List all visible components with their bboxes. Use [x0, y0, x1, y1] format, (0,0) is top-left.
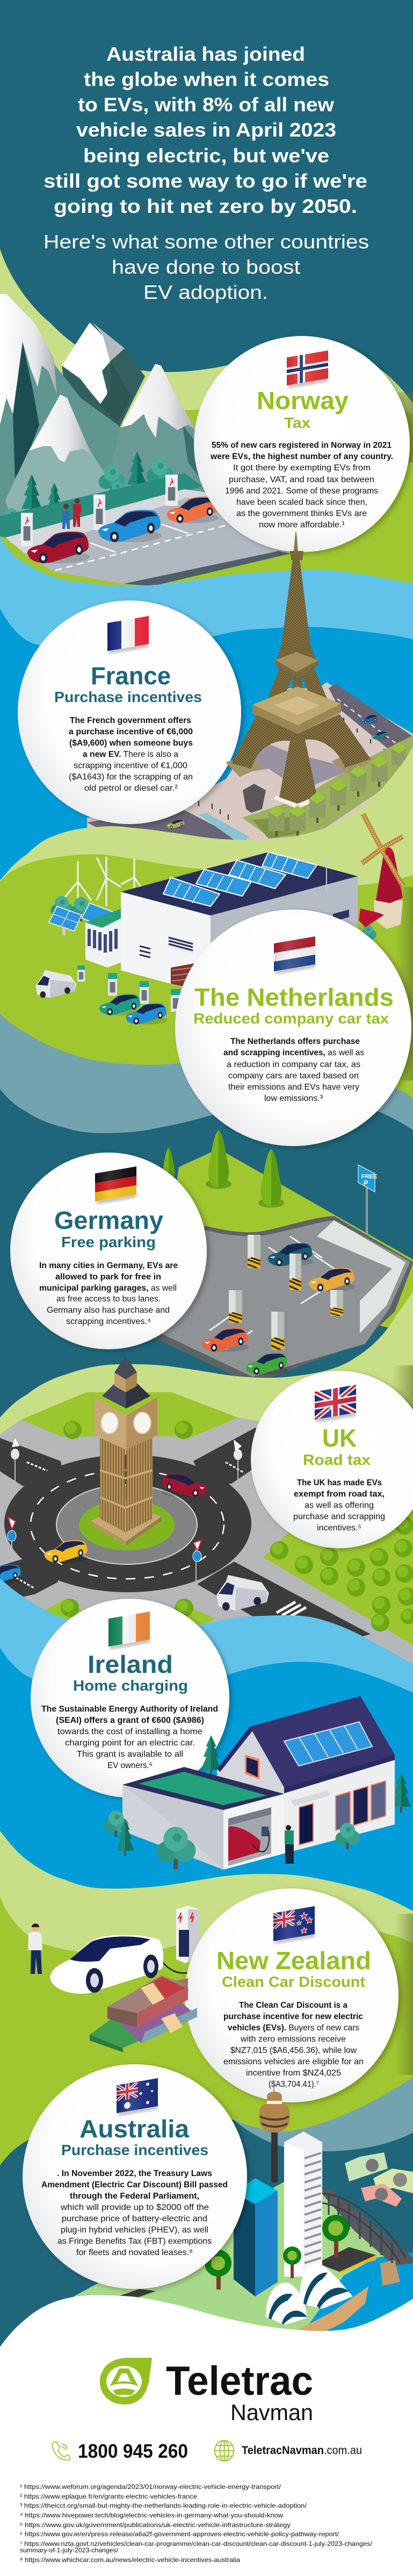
body: Australia text: plug-in hybrid vehicles (PHEV), as well: [61, 2226, 208, 2235]
body: Netherlands text: [223, 1037, 364, 1103]
icon: Ireland flag: [108, 1612, 150, 1650]
body: UK text: purchase and scrapping: [293, 1512, 385, 1521]
body: New Zealand text: emissions vehicles are eligible for an: [223, 2057, 364, 2066]
background: grey-blue band: [0, 1014, 413, 1183]
body: Australia text: Amendment (Electric Car Discount) Bill passed: [41, 2180, 228, 2189]
background: olive shade right 3: [395, 1914, 413, 2075]
body: Norway text: now more affordable.¹: [259, 520, 345, 529]
background: olive shade: [389, 392, 413, 462]
body: Netherlands text: low emissions.³: [264, 1094, 323, 1103]
illustration: windmill: [359, 814, 403, 942]
panel: New Zealand: [185, 1888, 398, 2102]
panel: Norway: [194, 336, 410, 552]
panel: Germany: [10, 1153, 207, 1349]
background: olive shade right 2: [392, 1365, 413, 1414]
body: UK text: The UK has made EVs: [297, 1478, 382, 1487]
illustration: Sydney buildings and trees: [205, 2080, 349, 2296]
background: bright green band: [0, 393, 413, 591]
body: Ireland text: This grant is available to all: [77, 1750, 183, 1759]
references: ⁷ https://www.nzta.govt.nz/vehicles/clean-car-programme/clean-car-discount/clean-car-discount-1-july-2023-changes/: [20, 2540, 373, 2548]
background: grey-blue band 2: [107, 2077, 413, 2204]
subheading: Home charging: Home charging: [73, 1677, 188, 1694]
background: dark teal band: [0, 1089, 413, 1451]
body: Germany text: [39, 1261, 178, 1326]
background: light green band 4: [0, 1831, 413, 1989]
body: New Zealand text: purchase incentive for new electric: [223, 2012, 363, 2021]
website: TeletracNavman.com.au: [242, 2444, 362, 2457]
background: white footer: [0, 2295, 413, 2576]
icon: Germany flag: [95, 1167, 136, 1205]
icon: New Zealand flag: [273, 1906, 315, 1944]
icon: globe: [215, 2441, 234, 2461]
icon: Norway flag: [287, 350, 328, 389]
body: Germany text: scrapping incentives.⁴: [66, 1317, 151, 1326]
references: ⁴ https://www.hivepower.tech/blog/electric-vehicles-in-germany-what-you-should-know: [20, 2511, 283, 2519]
body: UK text: as well as offering: [305, 1501, 374, 1510]
background: light blue band: [0, 536, 413, 699]
icon: France flag: [107, 616, 149, 654]
body: Netherlands text: company cars are taxed based on: [228, 1071, 359, 1081]
body: Netherlands text: a reduction in company car tax, as: [227, 1060, 360, 1069]
body: Norway text: 55% of new cars registered in Norway in 2021: [212, 441, 392, 450]
body: New Zealand text: The Clean Car Discount is a: [239, 2001, 347, 2010]
illustration: Eiffel Tower: [226, 532, 374, 809]
body: New Zealand text: ($A3,704.41).⁷: [269, 2080, 319, 2089]
headline: the globe when it comes: [84, 68, 329, 90]
body: New Zealand text: $NZ7,015 ($A6,456.36), while low: [230, 2046, 357, 2055]
body: France text: a purchase incentive of €6,000: [69, 727, 193, 736]
headline: Australia has joined: [106, 43, 305, 65]
body: France text: a new EV. There is also a: [83, 750, 178, 759]
body: Ireland text: charging point for an electric car.: [65, 1738, 195, 1748]
icon: free parking sign: FREE: [361, 1173, 377, 1180]
intro text: Here's what some other countries: [44, 231, 369, 253]
background: olive shade right: [395, 887, 413, 1081]
body: Germany text: municipal parking garages, as well: [39, 1284, 177, 1293]
references: ⁵ https://www.gov.uk/government/publications/uk-electric-vehicle-infrastructure-strategy: [20, 2521, 291, 2529]
body: Norway text: It got there by exempting EVs from: [233, 463, 371, 473]
background: light green band 3: [0, 1290, 413, 1666]
illustration: wind turbines: [63, 857, 141, 908]
heading: Ireland: Ireland: [88, 1650, 173, 1678]
subheading: Clean Car Discount: Clean Car Discount: [222, 1973, 365, 1990]
headline: still got some way to go if we're: [44, 170, 367, 192]
body: Germany text: Germany also has purchase and: [47, 1306, 170, 1315]
body: France text: ($A1643) for the scrapping of an: [69, 772, 193, 782]
body: New Zealand text: incentive from $NZ4,025: [246, 2069, 341, 2078]
body: Germany text: allowed to park for free in: [55, 1272, 161, 1282]
illustration: van and charging cars: [35, 965, 180, 1025]
heading: Germany: Germany: [54, 1206, 163, 1234]
body: Australia text: through the Federal Parliament,: [70, 2192, 199, 2201]
body: New Zealand text: with zero emissions receive: [240, 2035, 346, 2044]
panel: France: [18, 600, 241, 824]
heading: The Netherlands: The Netherlands: [194, 983, 394, 1011]
icon: phone: [52, 2442, 70, 2460]
heading: UK: UK: [322, 1424, 357, 1452]
heading: New Zealand: New Zealand: [216, 1947, 371, 1974]
illustration: Sydney Harbour Bridge: [322, 2193, 405, 2263]
illustration: person, white EV and charger: [28, 1906, 200, 1994]
panel: The Netherlands: [175, 910, 411, 1146]
illustration: Australian banknotes: [345, 2152, 413, 2207]
illustration: Sydney Opera House: [266, 2263, 353, 2325]
phone number: 1800 945 260: [78, 2440, 188, 2462]
illustration: Sydney ground and water: [74, 2172, 413, 2336]
body: Netherlands text: The Netherlands offers purchase: [230, 1037, 360, 1046]
references: ⁸ https://www.whichcar.com.au/news/electric-vehicle-incentives-australia: [20, 2556, 240, 2564]
background: mid blue band: [0, 609, 413, 914]
background: dark teal header band: [0, 0, 413, 538]
body: New Zealand text: [223, 2001, 364, 2089]
body: Australia text: [41, 2169, 228, 2257]
illustration: solar building: [121, 852, 358, 994]
body: Norway text: [210, 441, 393, 529]
background: light green band: [0, 249, 413, 591]
body: France text: scrapping incentive of €1,000: [74, 761, 187, 770]
heading: Australia: Australia: [79, 2115, 189, 2143]
illustration: parking cars and pillars: [202, 1235, 355, 1375]
body: Ireland text: The Sustainable Energy Authority of Ireland: [41, 1705, 218, 1714]
body: Norway text: were EVs, the highest number of any country.: [210, 452, 393, 461]
background: dark teal band 2: [0, 2113, 413, 2365]
illustration: cube trees beside tower: [269, 742, 406, 836]
references: ⁶ https://www.gov.ie/en/press-release/a6a2f-government-approves-electric-vehicle-policy-pathway-report/: [20, 2530, 339, 2538]
body: France text: old petrol or diesel car.²: [84, 784, 178, 793]
body: Australia text: which will provide up to $2000 off the: [60, 2203, 209, 2212]
body: UK text: exempt from road tax,: [294, 1490, 385, 1499]
illustration: parking lot: [153, 1130, 413, 1384]
body: France text: [69, 716, 193, 793]
panel: UK: [251, 1371, 413, 1548]
references: summary-of-1-july-2023-changes/: [20, 2546, 119, 2554]
logo text: Navman: Navman: [230, 2400, 313, 2425]
icon: Netherlands flag: [274, 936, 315, 975]
illustration: Paris plaza ground: [87, 682, 413, 860]
headline: vehicle sales in April 2023: [76, 119, 336, 141]
icon: Teletrac logo mark: [100, 2358, 152, 2405]
body: Norway text: 1996 and 2021. Some of these programs: [225, 486, 378, 496]
body: Australia text: as Fringe Benefits Tax (FBT) exemptions: [57, 2237, 212, 2246]
illustration: lawn with round bushes: [270, 1516, 413, 1632]
intro text: have done to boost: [112, 256, 300, 278]
heading: Norway: Norway: [257, 387, 349, 414]
icon: free parking sign: [358, 1165, 377, 1235]
headline: [44, 43, 367, 217]
body: UK text: incentives.⁵: [317, 1523, 361, 1533]
references: ³ https://theicct.org/small-but-mighty-the-netherlands-leading-role-in-electric-vehicle-adoption/: [20, 2502, 307, 2509]
illustration: house with home charger: [104, 1696, 411, 1870]
illustration: snowy mountains: [0, 294, 207, 536]
background: bright green band 4: [0, 1897, 413, 2204]
body: Norway text: have been scaled back since then,: [236, 498, 367, 507]
body: Norway text: purchase, VAT, and road tax between: [229, 475, 374, 484]
subheading: Purchase incentives: Purchase incentives: [61, 2142, 208, 2158]
body: Germany text: In many cities in Germany, EVs are: [39, 1261, 178, 1270]
illustration: New Zealand banknotes: [90, 1976, 197, 2052]
illustration: Big Ben: [91, 1356, 162, 1545]
body: France text: ($A9,600) when someone buys: [69, 739, 193, 748]
subheading: Free parking: Free parking: [61, 1234, 156, 1250]
subheading: Purchase incentives: Purchase incentives: [54, 689, 202, 705]
body: Ireland text: (SEAI) offers a grant of €600 ($A986): [56, 1716, 204, 1725]
headline: going to hit net zero by 2050.: [54, 195, 357, 217]
subheading: Reduced company car tax: Reduced company car tax: [193, 1010, 389, 1027]
body: Ireland text: [41, 1705, 218, 1770]
body: Ireland text: EV owners.⁶: [107, 1761, 153, 1770]
icon: UK flag: [315, 1385, 356, 1423]
background: mid blue band 2: [0, 1648, 413, 1935]
background: light blue band 2: [0, 1578, 413, 1828]
icon: Australia flag: [117, 2078, 158, 2116]
body: Netherlands text: their emissions and EVs have very: [228, 1083, 359, 1092]
subheading: Road tax: Road tax: [303, 1451, 371, 1468]
subheading: Tax: Tax: [284, 414, 310, 431]
background: light green band 2: [0, 746, 413, 1075]
illustration: small solar panels and trees: [49, 896, 121, 968]
body: Germany text: as free access to bus lanes.: [56, 1294, 161, 1304]
illustration: roundabout: [0, 1392, 413, 1672]
body: UK text: [293, 1478, 385, 1533]
body: Australia text: for fleets and novated leases.⁸: [76, 2248, 193, 2257]
illustration: charging road with cars: [0, 473, 290, 586]
intro text: [44, 231, 369, 303]
illustration: road signs and van: [0, 1438, 306, 1618]
body: Ireland text: towards the cost of installing a home: [57, 1727, 202, 1736]
heading: France: France: [91, 662, 171, 690]
references: [20, 2483, 373, 2564]
body: Norway text: as the government thinks EVs are: [236, 509, 367, 518]
references: ¹ https://www.weforum.org/agenda/2023/01/norway-electric-vehicle-energy-transport/: [20, 2483, 281, 2491]
body: Australia text: . In November 2022, the Treasury Laws: [57, 2169, 212, 2178]
panel: Ireland: [31, 1599, 229, 1798]
references: ² https://www.eplaque.fr/en/grants-electric-vehicles-france: [20, 2493, 197, 2500]
illustration: trees by the road: [2, 452, 173, 529]
icon: free parking sign: P: [364, 1179, 368, 1187]
body: France text: The French government offers: [70, 716, 191, 725]
body: Australia text: purchase price of battery-electric and: [62, 2214, 207, 2223]
body: New Zealand text: vehicles (EVs). Buyers of new cars: [228, 2023, 359, 2033]
body: Netherlands text: and scrapping incentives, as well as: [223, 1048, 364, 1057]
headline: to EVs, with 8% of all new: [78, 94, 335, 116]
intro text: EV adoption.: [143, 281, 268, 303]
background: bright green band 2: [0, 854, 413, 1129]
logo text: Teletrac: Teletrac: [166, 2358, 313, 2404]
panel: Australia: [23, 2064, 247, 2289]
headline: being electric, but we've: [83, 145, 329, 167]
